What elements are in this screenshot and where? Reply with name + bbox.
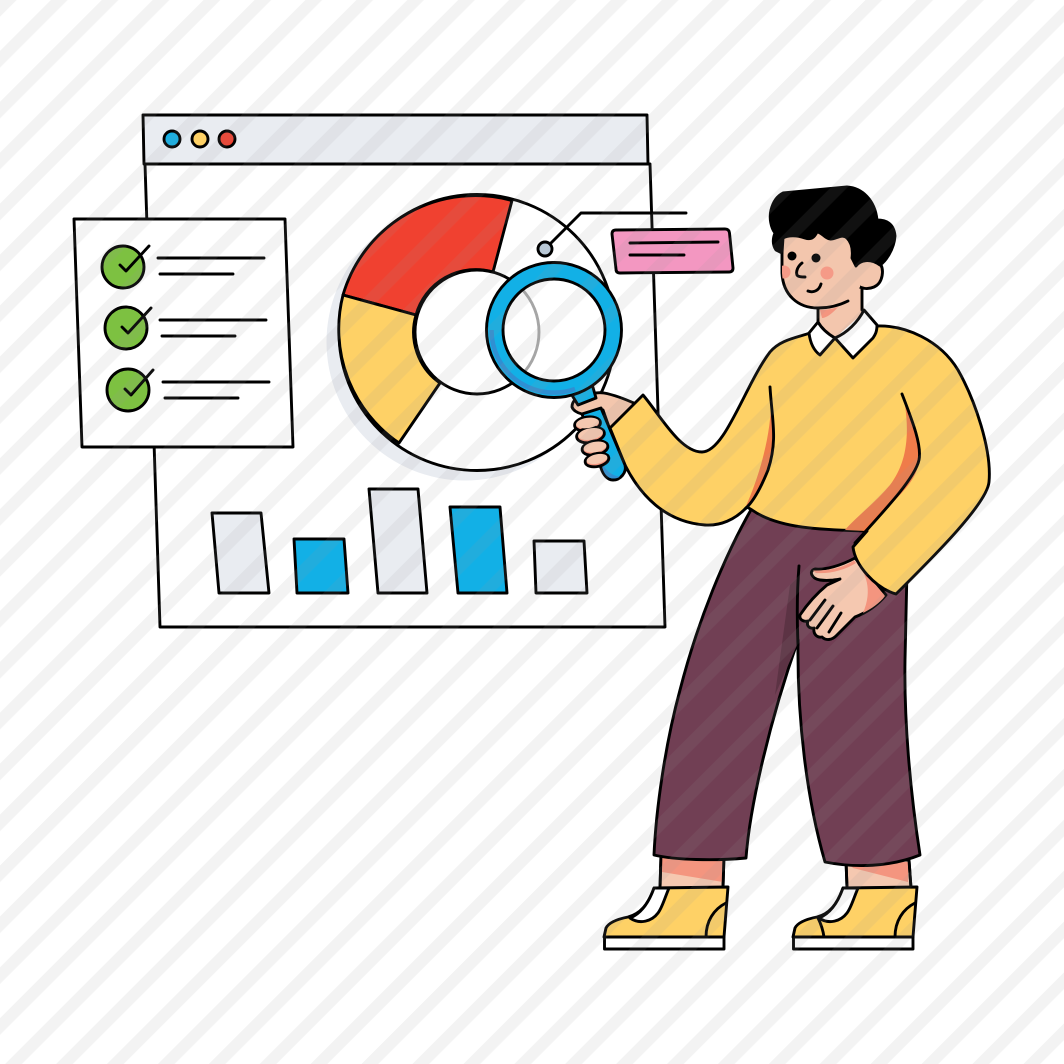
hand holding magnifier: palm and thumb	[572, 393, 636, 430]
window control buttons	[164, 131, 235, 147]
check item 3	[107, 369, 269, 411]
donut chart	[326, 194, 615, 480]
eyes	[788, 252, 820, 262]
ankles	[660, 855, 911, 888]
check item 1	[102, 246, 264, 288]
cheeks	[778, 266, 834, 280]
face	[778, 232, 862, 308]
gripping fingers	[574, 415, 610, 469]
window title bar	[143, 115, 648, 164]
magnifier neck	[570, 384, 596, 405]
right shoe	[793, 887, 917, 949]
magnifying glass	[486, 262, 625, 480]
resting hand	[800, 558, 886, 640]
sleeve shadow: left arm	[745, 405, 773, 508]
check item 2	[105, 307, 266, 349]
bar chart	[212, 489, 587, 593]
yellow sweater	[610, 326, 989, 594]
trouser fold shadow	[775, 578, 797, 695]
panel: checklist	[74, 219, 293, 447]
trousers	[654, 508, 920, 866]
left shoe	[604, 887, 728, 949]
magnifier lens	[503, 279, 605, 381]
magnifier handle	[582, 408, 625, 480]
donut shadow	[326, 204, 604, 480]
window body	[145, 164, 665, 627]
donut hole	[415, 270, 539, 394]
magnifier ring	[495, 271, 613, 389]
person	[486, 187, 989, 949]
sweater fold lines	[745, 387, 920, 543]
callout leader line and dot	[538, 213, 686, 256]
trouser centre seam	[797, 566, 799, 645]
shirt collar	[809, 310, 877, 358]
hair	[770, 187, 895, 266]
nose and smile	[797, 263, 821, 292]
callout label	[612, 229, 733, 273]
neck	[818, 285, 864, 338]
donut base	[339, 194, 615, 470]
yellow segment	[339, 295, 440, 443]
red segment	[343, 196, 512, 315]
ear	[854, 258, 882, 289]
panel: browser window	[143, 115, 665, 627]
sleeve shadow: right arm	[845, 405, 919, 531]
